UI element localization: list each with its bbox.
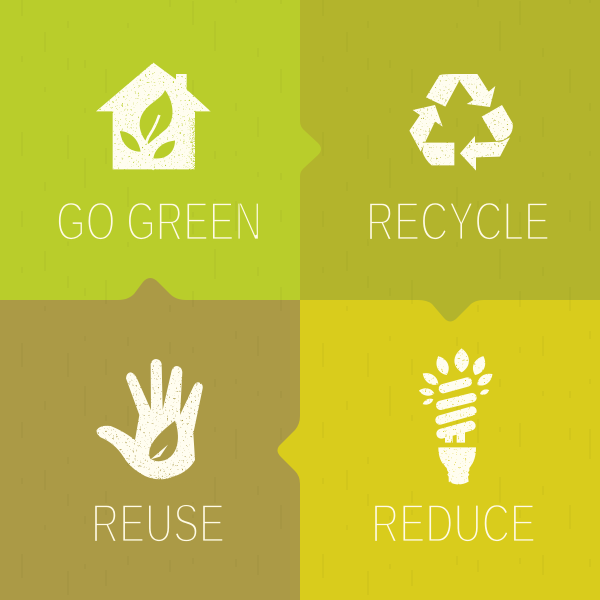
panel: go green background: [0, 0, 300, 300]
icon: light bulb with leaves: [418, 348, 495, 484]
panel: reduce background: [300, 300, 600, 600]
tab: reduce pointing left: [278, 416, 300, 484]
leaves crown: [418, 348, 495, 406]
tab: recycle pointing down: [418, 300, 484, 322]
heading: reduce: REDUCE: [371, 492, 536, 554]
tab: reuse pointing up: [118, 278, 186, 300]
spiral tube: [440, 382, 472, 434]
tab: go green pointing right: [300, 121, 321, 176]
icon: house with leaves: [96, 63, 211, 170]
panel: reuse background: [0, 300, 300, 600]
icon: recycling arrows: [409, 74, 513, 171]
panel: recycle background: [300, 0, 600, 300]
heading: reuse: REUSE: [91, 492, 225, 554]
bulb base: [438, 447, 476, 484]
icon: hand with leaf: [97, 359, 203, 484]
heading: go green: GO GREEN: [56, 190, 262, 252]
